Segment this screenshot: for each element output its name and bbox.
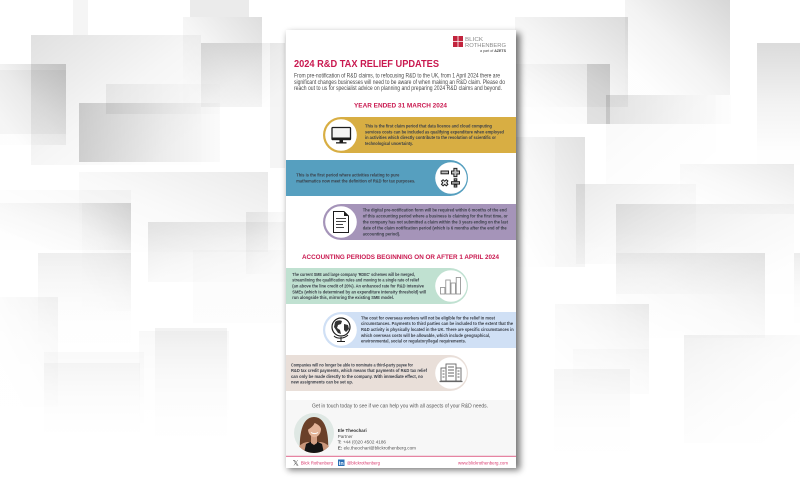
panel: third-party payee: Companies will no longer be able to nominate a third-party payee for (291, 362, 413, 368)
panel: digital pre-notification form (323, 204, 516, 240)
infographic card (286, 30, 520, 470)
footer (286, 456, 516, 467)
icon: globe (332, 318, 350, 342)
icon: LinkedIn: in (339, 461, 344, 467)
panel: overseas workers: environmental, social or regulatory/legal requirements. (361, 339, 467, 345)
icon: bar chart (440, 278, 461, 294)
intro text: significant changes businesses will need to be aware of when making an R&D claim. Please do (294, 79, 505, 86)
panel: pure mathematics: This is the first period where activities relating to pure (296, 173, 400, 179)
panel: pure mathematics: mathematics now meet the definition of R&D for tax purposes. (296, 179, 416, 185)
heading: year ended 31 March 2024: YEAR ENDED 31 MARCH 2024 (354, 102, 447, 110)
panel: overseas workers (323, 312, 516, 348)
footer: Blick Rothenberg (301, 460, 333, 466)
panel: overseas workers: R&D activity is physically located in the UK. There are specific circumstances in (361, 327, 514, 333)
panel: digital pre-notification form: of this accounting period where a business is claiming for the first time, or (363, 214, 508, 220)
panel: merged RDEC schemes (286, 268, 468, 304)
panel: third-party payee: new assignments can be set up. (291, 380, 354, 386)
card shadow (288, 33, 520, 470)
panel: digital pre-notification form: the company has not submitted a claim within the 3 years ending on the last (363, 220, 508, 226)
contact details: Ele Theochari (338, 428, 367, 434)
panel: cloud computing: This is the first claim period that data licence and cloud computing (365, 124, 492, 130)
title: 2024 R&D TAX RELIEF UPDATES (294, 59, 440, 70)
panel: overseas workers: The cost for overseas workers will not be eligible for the relief in most (361, 315, 495, 321)
intro text (294, 73, 505, 92)
panel: merged RDEC schemes: streamlining the qualification rules and moving to a single rate of relief (292, 278, 419, 284)
footer: www.blickrothenberg.com (458, 460, 508, 466)
panel: third-party payee: R&D tax credit payments, which means that payments of R&D tax relief (291, 368, 427, 374)
panel: merged RDEC schemes: run alongside this, mirroring the existing SME model. (292, 295, 395, 301)
panel: cloud computing: services costs can be included as qualifying expenditure when employed (365, 129, 504, 135)
icon: X: 𝕏 (293, 458, 300, 467)
panel: third-party payee (286, 355, 468, 391)
panel: overseas workers: circumstances. Payments to third parties can be included to the extent that the (361, 321, 513, 327)
icon: calculator symbols (441, 168, 460, 187)
intro text: reach out to us for specialist advice on planning and preparing 2024 R&D claims and beyond. (294, 85, 502, 92)
panel: cloud computing: technological uncertainty. (365, 141, 414, 147)
icon: monitor (332, 128, 350, 144)
panel: merged RDEC schemes: (an above the line credit of 20%). An enhanced rate for R&D intensive (292, 284, 424, 290)
icon: document (334, 212, 348, 232)
panel: overseas workers: which overseas costs will be allowable, which include geographical, (360, 333, 491, 339)
intro text: From pre-notification of R&D claims, to refocusing R&D to the UK, from 1 April 2024 there are (294, 73, 501, 80)
panel: pure mathematics (286, 160, 468, 196)
icon: LinkedIn (338, 460, 344, 467)
contact section (294, 404, 488, 453)
card panel (286, 30, 516, 468)
panel: merged RDEC schemes: SMEs (which is determined by an expenditure intensity threshold) will (292, 289, 427, 295)
panel: digital pre-notification form: The digital pre-notification form will be required within 6 months of the end (363, 208, 507, 214)
icon: office buildings (440, 364, 462, 382)
logo: Blick Rothenberg (453, 36, 506, 53)
logo: Blick Rothenberg: ROTHENBERG (465, 43, 506, 49)
panel: merged RDEC schemes: The current SME and large company 'RDEC' schemes will be merged, (292, 272, 415, 278)
panel: digital pre-notification form: date of the claim notification period (which is 6 months after the end of the (363, 225, 507, 231)
panel: cloud computing: in activities which directly contribute to the resolution of scientific or (365, 135, 496, 141)
heading: accounting periods: ACCOUNTING PERIODS BEGINNING ON OR AFTER 1 APRIL 2024 (302, 254, 499, 261)
contact details: T: +44 (0)20 4502 4186 (338, 439, 386, 445)
call to action: Get in touch today to see if we can help you with all aspects of your R&D needs. (312, 404, 488, 410)
photo: Ele Theochari (294, 413, 334, 453)
panel: digital pre-notification form: accounting period). (363, 231, 401, 237)
contact details: E: ele.theochari@blickrothenberg.com (338, 445, 416, 451)
contact details (338, 428, 416, 451)
contact details: Partner (338, 434, 353, 440)
logo: Blick Rothenberg: a part of AZETS (480, 49, 506, 53)
logo: Blick Rothenberg: BLICK (465, 37, 484, 43)
panel: cloud computing (323, 117, 516, 153)
panel: third-party payee: can only be made directly to the company. With immediate effect, no (291, 374, 423, 380)
footer: @blickrothenberg (347, 460, 380, 466)
